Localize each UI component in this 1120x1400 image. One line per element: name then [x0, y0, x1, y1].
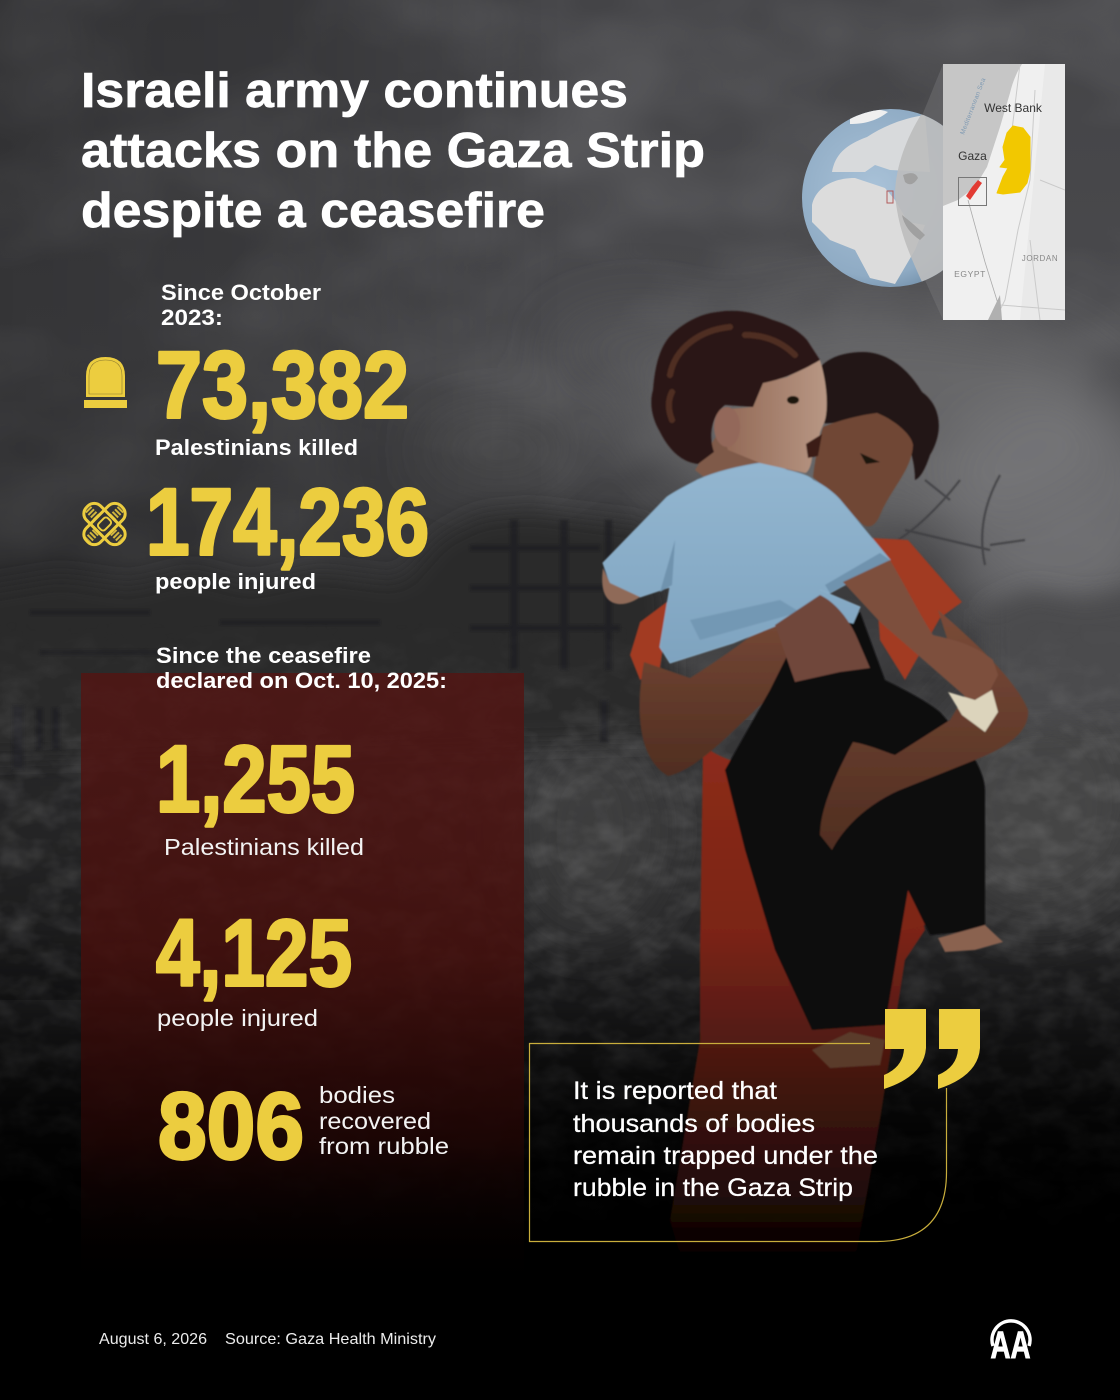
text block: since October 2023 heading: 2023:: [161, 305, 223, 330]
stat: 806 bodies recovered: recovered: [319, 1108, 431, 1134]
toddler hair: [651, 311, 820, 464]
text block: since the ceasefire heading: Since the ceasefire: [156, 643, 371, 668]
globe: [802, 109, 943, 287]
stat: 1,255 killed: 1,255: [156, 726, 355, 832]
title: attacks on the Gaza Strip: [81, 124, 705, 178]
stat: 1,255 killed: Palestinians killed: [164, 834, 364, 860]
text block: since the ceasefire heading: declared on Oct. 10, 2025:: [156, 668, 447, 693]
toddler left hand: [602, 568, 640, 604]
icon: closing quotation marks: [884, 1009, 980, 1089]
girl's hand: [775, 595, 870, 682]
toddler neck: [695, 430, 800, 490]
stat: 806 bodies recovered: from rubble: [319, 1133, 449, 1159]
stat: 73,382 killed: Palestinians killed: [155, 435, 358, 460]
inset map: JORDAN: [1022, 254, 1058, 263]
girl's eye: [860, 453, 880, 464]
logo: Anadolu Agency: [990, 1321, 1030, 1367]
location marker on globe: [887, 191, 893, 203]
callout: quote box: rubble in the Gaza Strip: [573, 1174, 853, 1202]
Gaza strip: [966, 180, 982, 200]
locator map: globe and Gaza inset: [800, 64, 1065, 320]
girl's face: [813, 413, 913, 526]
stat: 4,125 injured: people injured: [157, 1005, 318, 1031]
toddler eye: [787, 396, 799, 404]
red dress: [670, 745, 925, 1290]
girl's hair: [812, 352, 939, 480]
stat: 174,236 injured: people injured: [155, 569, 316, 594]
globe shaded inset wedge: [895, 114, 943, 282]
logo: Anadolu Agency: AA: [990, 1325, 1030, 1367]
bread: [948, 690, 998, 732]
toddler face: [715, 360, 827, 473]
stat: 806 bodies recovered: 806: [158, 1074, 304, 1180]
West Bank: [997, 126, 1030, 194]
callout: quote box: [530, 1044, 946, 1242]
red shirt: [630, 538, 962, 680]
pointer cone outside globe: [900, 64, 943, 320]
photo: older girl carrying toddler: [602, 311, 1028, 1290]
girl's right arm: [820, 610, 1028, 850]
toddler arm: [843, 560, 998, 700]
footer: date and source: August 6, 2026: [99, 1331, 207, 1348]
toddler foot: [938, 925, 1003, 952]
Gaza box: [958, 178, 986, 206]
panel: ceasefire red gradient box: [81, 673, 524, 1293]
title: despite a ceasefire: [81, 184, 545, 238]
toddler mouth: [806, 434, 822, 458]
text block: since October 2023 heading: [161, 280, 321, 330]
girl's left arm: [639, 596, 869, 776]
title: [81, 64, 705, 238]
footer: date and source: [99, 1331, 436, 1348]
text block: since the ceasefire heading: [156, 643, 447, 693]
toddler ear: [714, 407, 740, 447]
ruined buildings silhouette: [0, 510, 670, 760]
inset map: Mediterranean Sea: [959, 77, 988, 136]
inset map: Gaza: [958, 149, 987, 163]
toddler shirt: [603, 462, 890, 663]
callout: quote box: It is reported that: [573, 1077, 777, 1105]
callout: quote box: remain trapped under the: [573, 1142, 878, 1170]
black trousers: [725, 610, 985, 1030]
tree: [890, 475, 1025, 565]
title: Israeli army continues: [81, 64, 628, 118]
icon: gravestone: [84, 357, 127, 408]
map labels: West Bank: [984, 101, 1043, 115]
inset map: [943, 64, 1065, 320]
stat: 73,382 killed: 73,382: [156, 332, 409, 438]
stat: 806 bodies recovered: [158, 1074, 449, 1180]
footer: date and source: Source: Gaza Health Ministry: [225, 1331, 436, 1348]
inset map: EGYPT: [954, 269, 986, 279]
stat: 806 bodies recovered: bodies: [319, 1082, 395, 1108]
rubble texture: [0, 679, 1120, 1145]
stat: 4,125 injured: 4,125: [156, 900, 352, 1006]
stat: 174,236 injured: 174,236: [146, 470, 429, 576]
text block: since October 2023 heading: Since October: [161, 280, 321, 305]
icon: crossed bandages: [80, 500, 129, 548]
callout: quote box: thousands of bodies: [573, 1110, 815, 1138]
stat: 4,125 injured: [156, 900, 352, 1031]
